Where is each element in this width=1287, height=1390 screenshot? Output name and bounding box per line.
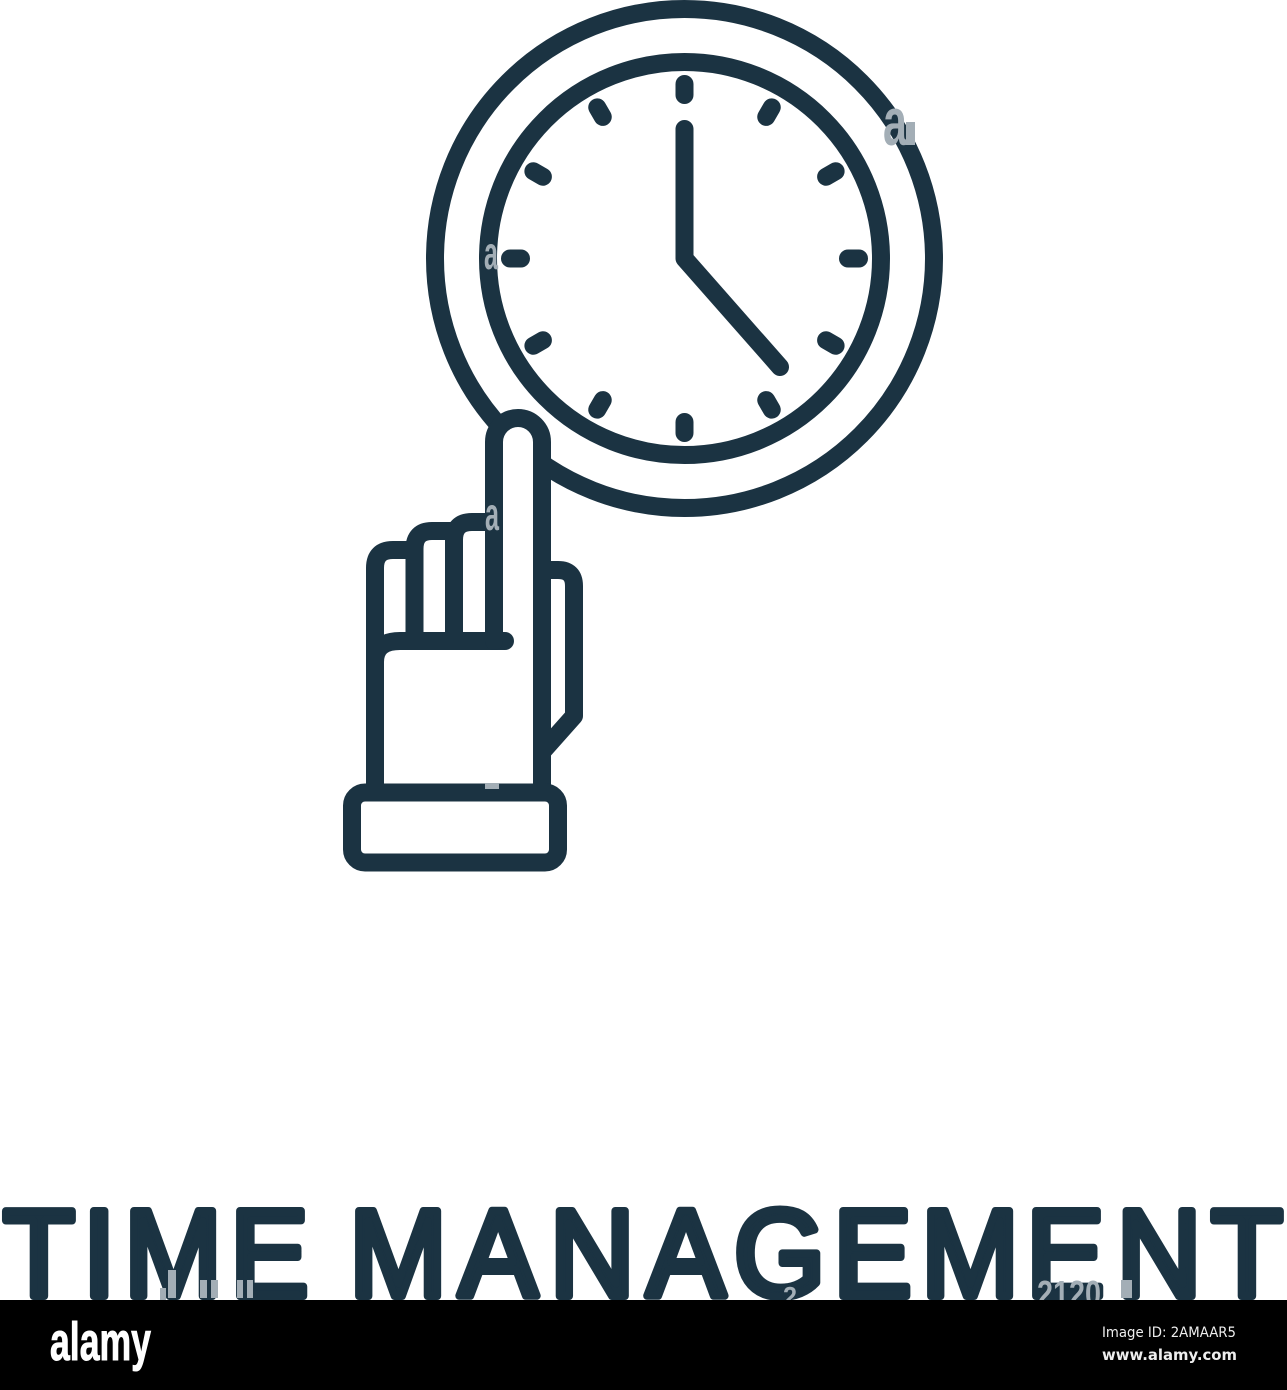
clock hands xyxy=(684,129,780,367)
hand: cuff xyxy=(352,792,558,862)
watermark fragments on title: 2 xyxy=(783,1281,797,1312)
watermark fragments on icon: a xyxy=(485,488,499,540)
clock inner ring xyxy=(488,62,881,455)
clock outer ring xyxy=(435,9,934,508)
watermark fragments on title: 2120 xyxy=(1037,1273,1101,1314)
image id: Image ID: 2AMAAR5 xyxy=(1102,1325,1236,1341)
footer logo: alamy xyxy=(50,1312,151,1372)
hand: white fill of finger and palm xyxy=(375,418,542,790)
clock hour ticks xyxy=(510,84,859,433)
watermark fragments on icon: a xyxy=(883,84,908,160)
website url: www.alamy.com xyxy=(1102,1346,1237,1364)
hand: thumb xyxy=(542,570,574,752)
watermark fragments on icon: a xyxy=(484,227,498,279)
watermark fragments on icon xyxy=(484,84,915,789)
title: TIME MANAGEMENT xyxy=(0,1184,1283,1323)
hand: index finger outline xyxy=(494,418,542,785)
watermark fragments on title xyxy=(160,1270,1132,1314)
footer band xyxy=(0,1300,1287,1390)
icon: clock with pointing hand xyxy=(352,9,934,862)
hand: palm and curled fingers xyxy=(375,522,505,790)
